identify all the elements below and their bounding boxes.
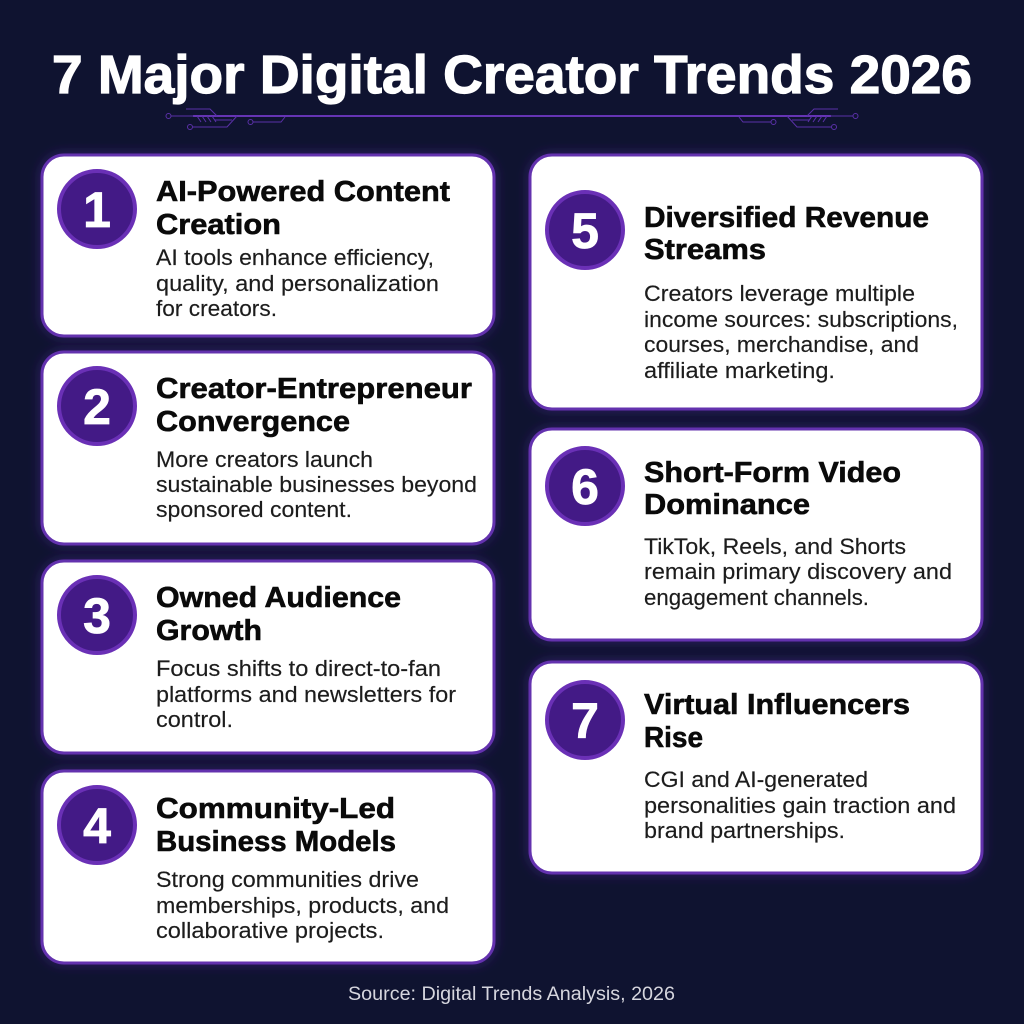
heading: trend 4	[156, 793, 396, 858]
description: trend 3: Focus shifts to direct-to-fan	[156, 656, 441, 681]
description: trend 4: Strong communities drive	[156, 867, 419, 892]
panel: trend 6	[530, 429, 982, 640]
description: trend 1: AI tools enhance efficiency,	[156, 245, 434, 270]
heading: trend 1: AI-Powered Content	[156, 176, 450, 208]
badge: 6: 6	[571, 459, 599, 515]
panel: trend 5	[530, 155, 982, 409]
heading: trend 2	[156, 373, 472, 438]
title divider: circuit line	[166, 109, 858, 130]
description: trend 3	[156, 656, 456, 732]
description: trend 7: brand partnerships.	[644, 818, 845, 843]
description: trend 7	[644, 767, 956, 843]
heading: trend 1	[156, 176, 450, 241]
heading: trend 1: Creation	[156, 209, 281, 241]
description: trend 2: More creators launch	[156, 447, 373, 472]
heading: trend 4: Community-Led	[156, 793, 395, 825]
description: trend 6: remain primary discovery and	[644, 559, 952, 584]
heading: trend 2: Convergence	[156, 406, 350, 438]
panel: trend 7	[530, 662, 982, 873]
description: trend 1: for creators.	[156, 296, 277, 321]
heading: trend 4: Business Models	[156, 826, 396, 858]
panel: trend 4	[42, 771, 494, 963]
description: trend 6: TikTok, Reels, and Shorts	[644, 534, 906, 559]
heading: trend 5: Diversified Revenue	[644, 202, 929, 234]
heading: trend 3	[156, 582, 401, 647]
heading: trend 3: Growth	[156, 615, 262, 647]
badge: 1: 1	[83, 182, 111, 238]
description: trend 3: platforms and newsletters for	[156, 682, 456, 707]
badge: 4: 4	[83, 798, 111, 854]
badge: 5	[547, 192, 623, 268]
badge: 5: 5	[571, 203, 599, 259]
description: trend 2: sponsored content.	[156, 497, 352, 522]
badge: 7	[547, 682, 623, 758]
badge: 2	[59, 368, 135, 444]
title: 7 Major Digital Creator Trends 2026	[52, 45, 972, 105]
heading: trend 6: Dominance	[644, 489, 810, 521]
badge: 3	[59, 577, 135, 653]
description: trend 2: sustainable businesses beyond	[156, 472, 477, 497]
description: trend 3: control.	[156, 707, 233, 732]
heading: trend 2: Creator-Entrepreneur	[156, 373, 472, 405]
description: trend 4	[156, 867, 449, 943]
description: trend 6: engagement channels.	[644, 585, 869, 610]
description: trend 5	[644, 281, 958, 383]
description: trend 7: CGI and AI-generated	[644, 767, 868, 792]
heading: trend 5: Streams	[644, 234, 766, 266]
description: trend 5: income sources: subscriptions,	[644, 307, 958, 332]
badge: 2: 2	[83, 379, 111, 435]
description: trend 1	[156, 245, 439, 321]
panel: trend 1	[42, 155, 494, 336]
description: trend 4: memberships, products, and	[156, 893, 449, 918]
heading: trend 6	[644, 457, 901, 521]
description: trend 5: courses, merchandise, and	[644, 332, 919, 357]
badge: 4	[59, 787, 135, 863]
heading: trend 7	[644, 689, 910, 754]
description: trend 4: collaborative projects.	[156, 918, 384, 943]
panel: trend 2	[42, 352, 494, 544]
badge: 6	[547, 448, 623, 524]
panel: trend 3	[42, 561, 494, 753]
description: trend 7: personalities gain traction and	[644, 793, 956, 818]
description: trend 5: affiliate marketing.	[644, 358, 835, 383]
heading: trend 5	[644, 202, 929, 266]
heading: trend 7: Rise	[644, 722, 703, 754]
heading: trend 7: Virtual Influencers	[644, 689, 910, 721]
heading: trend 6: Short-Form Video	[644, 457, 901, 489]
heading: trend 3: Owned Audience	[156, 582, 401, 614]
description: trend 2	[156, 447, 477, 522]
description: trend 5: Creators leverage multiple	[644, 281, 915, 306]
source note: Source: Digital Trends Analysis, 2026	[348, 984, 675, 1005]
badge: 3: 3	[83, 588, 111, 644]
badge: 7: 7	[571, 693, 599, 749]
description: trend 6	[644, 534, 952, 610]
description: trend 1: quality, and personalization	[156, 271, 439, 296]
badge: 1	[59, 171, 135, 247]
